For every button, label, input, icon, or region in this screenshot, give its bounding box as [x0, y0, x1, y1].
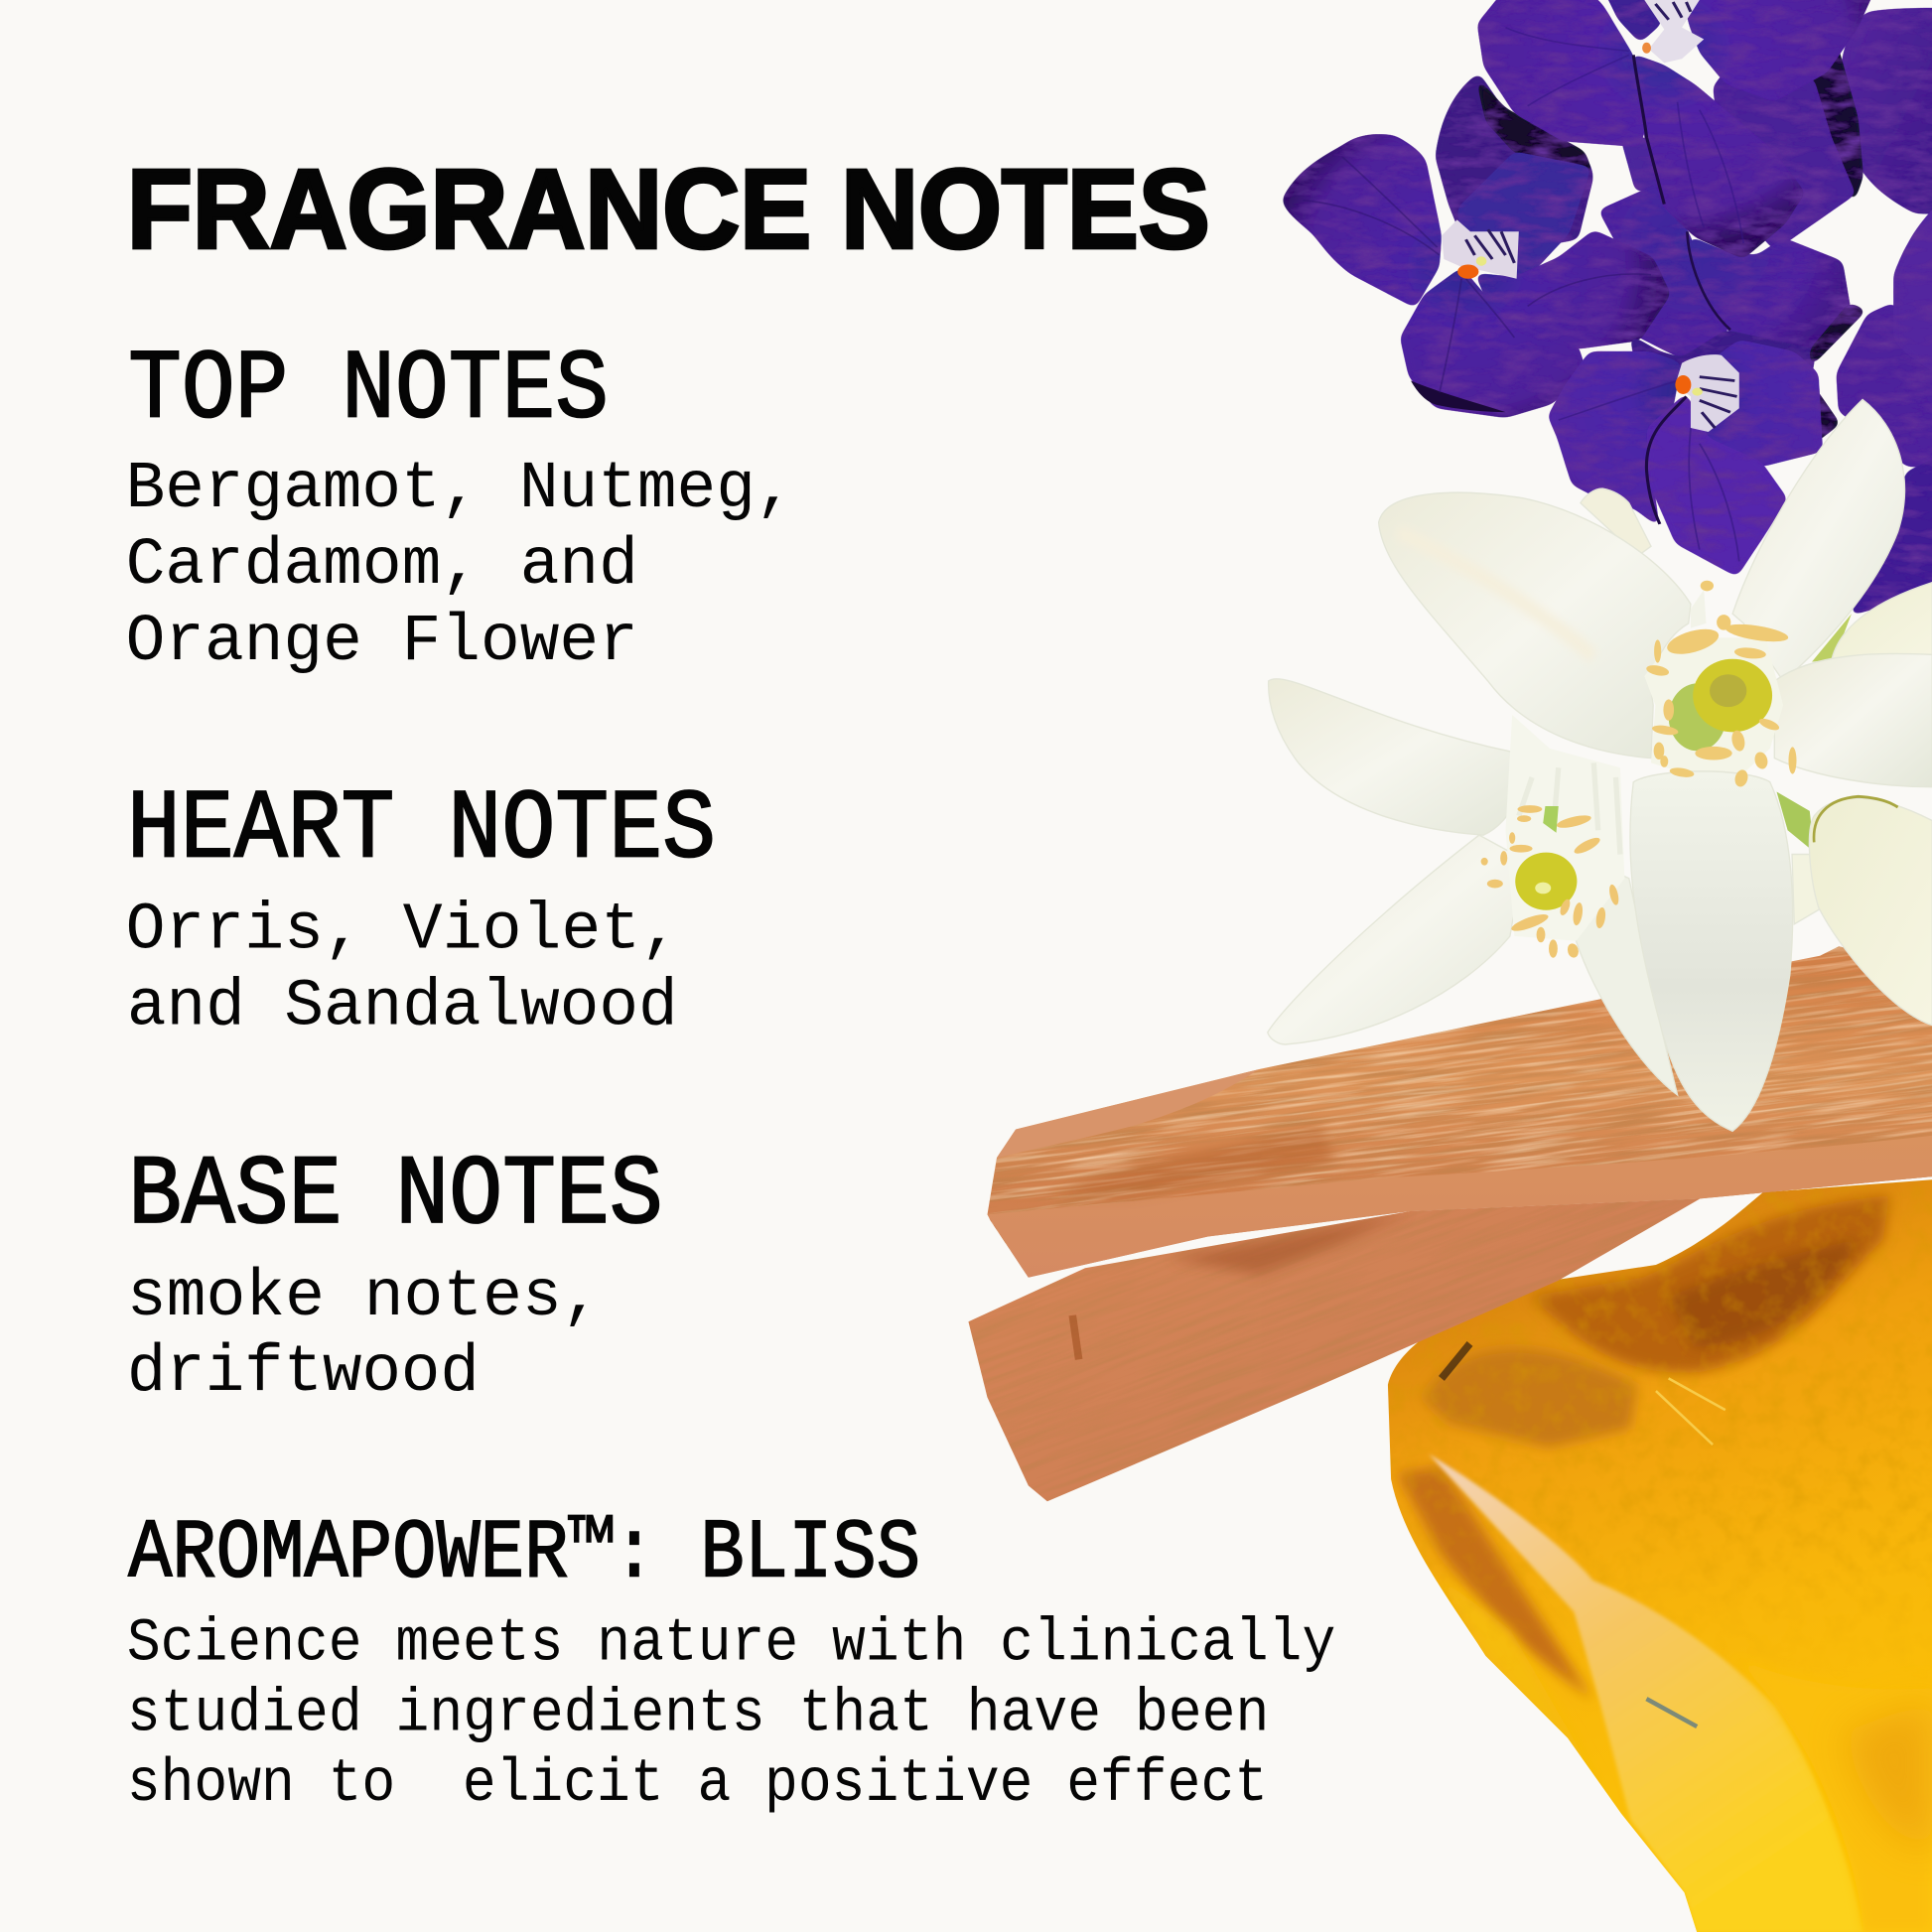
heading: aromapower: AROMAPOWER™: BLISS — [128, 1507, 920, 1601]
upper stick — [987, 946, 1932, 1278]
heading: top notes: TOP NOTES — [128, 334, 609, 446]
image: orange blossom flowers — [1268, 399, 1932, 1131]
section: base notes — [127, 1140, 663, 1411]
violet: flower B — [1477, 0, 1875, 259]
text: heart notes list — [126, 893, 680, 1044]
blossom: upper flower petals — [1379, 399, 1932, 1131]
text: top notes list: Bergamot, Nutmeg, — [126, 452, 794, 527]
text: aromapower description — [127, 1610, 1335, 1819]
text: top notes list — [126, 452, 794, 680]
title: FRAGRANCE NOTES — [127, 146, 1210, 271]
text: heart notes list: and Sandalwood — [127, 969, 678, 1044]
blossom: lower flower petals — [1268, 679, 1678, 1095]
blossom: small back petals — [1581, 488, 1932, 662]
violet: lower right flowers — [1836, 201, 1932, 617]
violet centre — [1442, 219, 1519, 279]
text: top notes list: Orange Flower — [126, 605, 638, 680]
section: heart notes — [126, 774, 716, 1044]
text: aromapower description: Science meets nature with clinically — [127, 1610, 1335, 1679]
violet centre — [1642, 0, 1704, 63]
image: amber resin chunk — [1385, 1176, 1932, 1932]
text: aromapower description: studied ingredients that have been — [127, 1680, 1269, 1748]
violet: flower A — [1282, 72, 1671, 418]
image: sandalwood sticks — [969, 946, 1932, 1501]
blossom: lower flower centre — [1481, 805, 1620, 959]
image: violet flowers — [1282, 0, 1932, 617]
text: top notes list: Cardamom, and — [126, 528, 638, 604]
section: top notes — [126, 334, 794, 680]
blossom: upper flower centre — [1646, 581, 1796, 788]
text: heart notes list: Orris, Violet, — [126, 893, 680, 968]
lower stick — [969, 1199, 1700, 1501]
text: aromapower description: shown to elicit a positive effect — [127, 1750, 1268, 1819]
text: base notes list: driftwood — [127, 1335, 480, 1411]
text: base notes list: smoke notes, — [127, 1260, 602, 1335]
section: aromapower — [127, 1507, 1335, 1819]
violet centre — [1675, 354, 1739, 432]
blossom: bud and stem — [1777, 792, 1932, 1026]
violet: back flower — [1598, 59, 1856, 359]
heading: base notes: BASE NOTES — [128, 1140, 663, 1252]
heading: heart notes: HEART NOTES — [127, 774, 716, 887]
violet: flower E — [1548, 302, 1867, 577]
violet: right edge flower — [1801, 8, 1932, 213]
text: base notes list — [127, 1260, 602, 1411]
